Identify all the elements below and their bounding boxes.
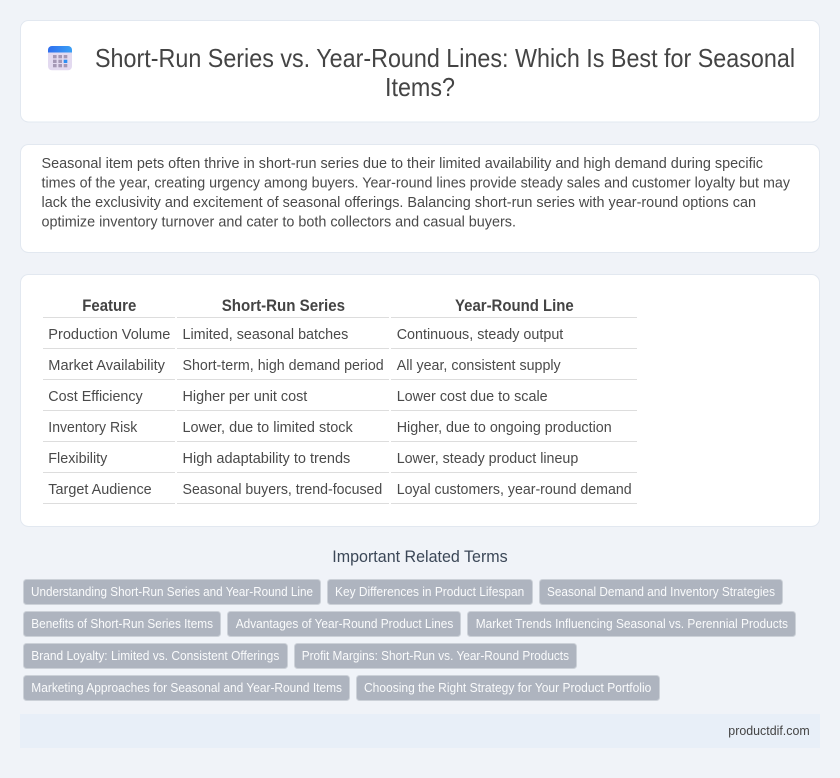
- row: cost efficiency: Lower cost due to scale: [397, 389, 548, 405]
- tag: [356, 676, 660, 700]
- tag list: related terms: [24, 580, 796, 700]
- tag: Key Differences in Product Lifespan: [335, 585, 524, 599]
- row: target audience: [48, 482, 632, 498]
- tag: Marketing Approaches for Seasonal and Year-Round Items: [31, 681, 342, 695]
- row: production volume: Limited, seasonal batches: [182, 327, 348, 343]
- table header row: Feature: [82, 297, 136, 315]
- tag: Brand Loyalty: Limited vs. Consistent Offerings: [31, 649, 279, 663]
- icon: calendar: [48, 46, 72, 70]
- panel: header: [20, 20, 820, 122]
- tag: [24, 644, 288, 668]
- heading: important related terms: Important Related Terms: [332, 548, 508, 566]
- tag: Market Trends Influencing Seasonal vs. Perennial Products: [476, 617, 788, 631]
- tag: Seasonal Demand and Inventory Strategies: [547, 585, 775, 599]
- tag: [24, 612, 220, 636]
- tag: Understanding Short-Run Series and Year-Round Line: [31, 585, 313, 599]
- row: production volume: Continuous, steady output: [397, 327, 563, 343]
- tag: [468, 612, 796, 636]
- tag: [24, 580, 320, 604]
- tag: [228, 612, 460, 636]
- text block: summary: optimize inventory turnover and cater to both collectors and casual buyers.: [42, 214, 516, 230]
- tag: [540, 580, 782, 604]
- row: cost efficiency: Cost Efficiency: [48, 389, 143, 405]
- row: cost efficiency: Higher per unit cost: [182, 389, 307, 405]
- table header row: Short-Run Series: [222, 297, 345, 315]
- tag: [24, 676, 350, 700]
- row: inventory risk: Inventory Risk: [48, 420, 138, 436]
- title: Items?: [385, 74, 455, 102]
- tag: [294, 644, 576, 668]
- table: feature comparison: [43, 297, 637, 504]
- row: market availability: Market Availability: [48, 358, 166, 374]
- row: target audience: Loyal customers, year-round demand: [397, 482, 632, 498]
- row: flexibility: Flexibility: [48, 451, 108, 467]
- row: target audience: Seasonal buyers, trend-focused: [182, 482, 382, 498]
- row: inventory risk: Higher, due to ongoing production: [397, 420, 612, 436]
- text block: summary: times of the year, creating urgency among buyers. Year-round lines provide steady sales and customer loyalty but may: [42, 176, 791, 192]
- panel: comparison table: [20, 274, 820, 526]
- tag: Advantages of Year-Round Product Lines: [236, 617, 453, 631]
- row: flexibility: [48, 451, 578, 467]
- row: cost efficiency: [48, 389, 548, 405]
- row: market availability: Short-term, high demand period: [182, 358, 384, 374]
- tag: Profit Margins: Short-Run vs. Year-Round Products: [302, 649, 569, 663]
- text block: summary: [42, 156, 791, 230]
- row: production volume: [48, 327, 563, 343]
- row: production volume: Production Volume: [48, 327, 170, 343]
- tag: [328, 580, 532, 604]
- text block: summary: lack the exclusivity and excitement of seasonal offerings. Balancing short-run series with year-round options can: [42, 195, 756, 211]
- table header row: [82, 297, 574, 315]
- title: [95, 45, 795, 102]
- row: inventory risk: Lower, due to limited stock: [182, 420, 353, 436]
- footer: [20, 714, 820, 748]
- row: inventory risk: [48, 420, 612, 436]
- text block: summary: Seasonal item pets often thrive in short-run series due to their limited availability and high demand during specific: [42, 156, 764, 172]
- table header row: Year-Round Line: [455, 297, 574, 315]
- tag: Benefits of Short-Run Series Items: [31, 617, 213, 631]
- row: market availability: All year, consistent supply: [397, 358, 561, 374]
- panel: summary paragraph: [20, 144, 820, 252]
- footer source text: productdif.com: [728, 723, 810, 738]
- row: target audience: Target Audience: [48, 482, 152, 498]
- row: flexibility: High adaptability to trends: [182, 451, 350, 467]
- row: flexibility: Lower, steady product lineup: [397, 451, 578, 467]
- row: market availability: [48, 358, 561, 374]
- tag: Choosing the Right Strategy for Your Product Portfolio: [364, 681, 651, 695]
